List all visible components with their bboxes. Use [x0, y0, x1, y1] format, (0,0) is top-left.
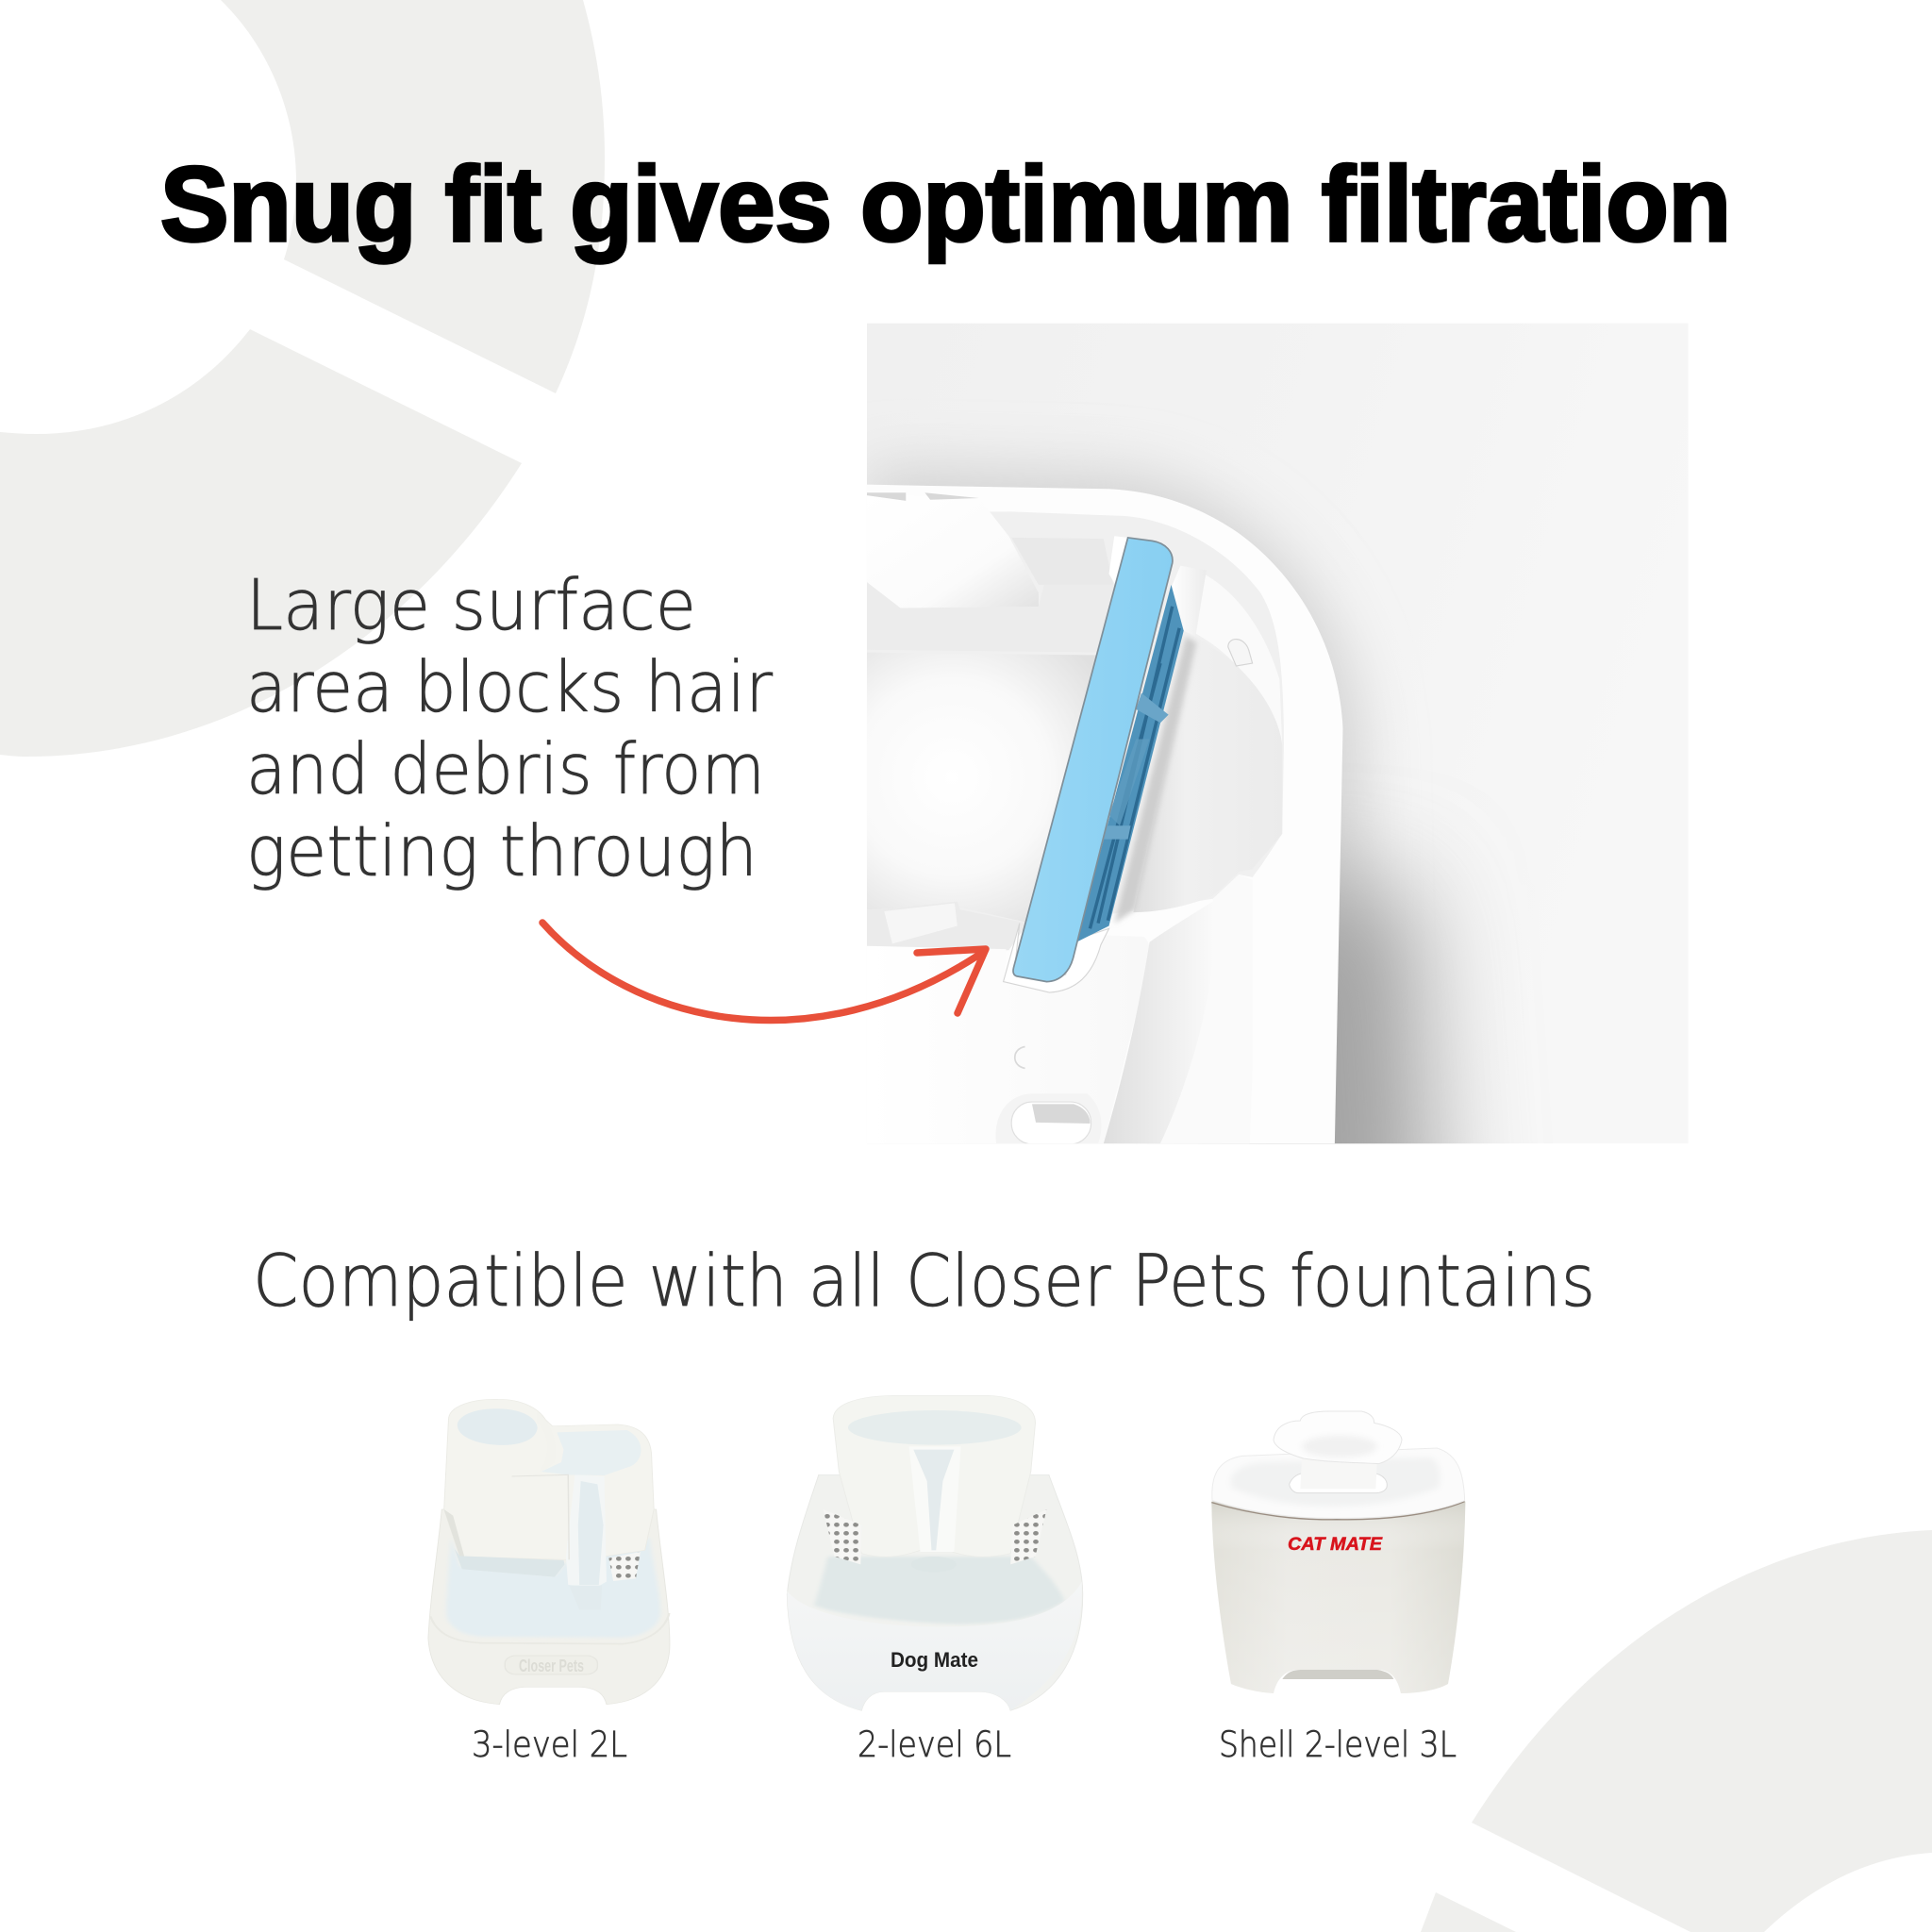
flower shade: [1302, 1436, 1377, 1457]
label: 3-level 2L: 3-level 2L: [472, 1724, 627, 1765]
arrow pointing to filter: [542, 923, 986, 1021]
left perforated panel: [824, 1509, 861, 1564]
spout stem: [1300, 1457, 1377, 1489]
lid: [1212, 1448, 1465, 1518]
right band of lower body: [1104, 914, 1194, 1143]
background paw shape: top left: [0, 0, 605, 757]
tower waterline shade: [444, 1509, 464, 1557]
top collar around filter: [1109, 536, 1207, 636]
left cavity: [867, 653, 1101, 924]
filter blue face: [1013, 538, 1173, 982]
top block: [867, 511, 1039, 608]
wall edge: [511, 1474, 569, 1559]
inner water: [814, 1557, 1065, 1624]
cup pour lip: [537, 1412, 556, 1472]
panel: fountain cutaway with filter: [867, 324, 1689, 1143]
title: Snug fit gives optimum filtration: [160, 145, 1731, 263]
upper basin water: [541, 1430, 641, 1475]
cavity upper ledge: [867, 582, 1117, 653]
tray water: [446, 1538, 660, 1638]
spout: [566, 1474, 607, 1588]
text block: filter description: getting through: [246, 811, 758, 892]
filter chamber wall: [1134, 672, 1282, 912]
notch shadow: [1282, 1670, 1393, 1679]
tower body: [444, 1399, 654, 1559]
top notch: [867, 492, 979, 501]
right front wall: [1160, 874, 1253, 1143]
tray rim: [430, 1613, 669, 1644]
bottom shelf: [892, 926, 1024, 951]
stream: [578, 1481, 604, 1585]
bottom slot: [995, 1093, 1101, 1144]
body sheen: [1211, 1502, 1465, 1693]
fountain: 2-level 6L: [787, 1395, 1083, 1710]
top water: [848, 1410, 1022, 1445]
tower: [833, 1395, 1036, 1557]
flower top: [1274, 1411, 1402, 1464]
shelf lip: [884, 903, 958, 943]
label: 2-level 6L: 2-level 6L: [858, 1724, 1011, 1765]
label: Shell 2-level 3L: Shell 2-level 3L: [1219, 1724, 1457, 1765]
shoulder ledge: [1196, 575, 1282, 741]
bottom collar around filter: [1004, 924, 1109, 992]
stream: [913, 1450, 954, 1550]
panel background: [867, 324, 1689, 1143]
embossed brand: Closer Pets: [519, 1657, 584, 1675]
text block: filter description: and debris from: [246, 729, 765, 810]
text block: filter description: area blocks hair: [246, 647, 774, 728]
lower front body: [867, 945, 1006, 951]
perforated panel: [608, 1552, 641, 1581]
lid recess: [1231, 1457, 1441, 1507]
stream base ripple: [911, 1557, 957, 1573]
lid seam: [1211, 1502, 1465, 1520]
fountain: shell 2-level 3L: [1211, 1411, 1465, 1693]
spout channel: [909, 1446, 961, 1552]
cup water: [458, 1408, 538, 1445]
embossed badge: [505, 1656, 597, 1674]
filter grid side: [1076, 585, 1184, 942]
text block: filter description: [246, 565, 774, 892]
fountain outer body: [867, 485, 1342, 1143]
shadow beside filter: [1114, 636, 1197, 924]
post detail: [1228, 640, 1253, 666]
front face: [787, 1582, 1082, 1710]
upper recess: [1011, 538, 1113, 585]
background paw shape: bottom right: [1421, 1530, 1932, 1932]
fountain: 3-level 2L: [428, 1399, 670, 1705]
inner rim area: [867, 511, 1284, 950]
fountain drop shadow: [867, 468, 1440, 1286]
tray: [428, 1509, 670, 1705]
splash: [569, 1586, 602, 1610]
brand: CAT MATE: CAT MATE: [1288, 1535, 1383, 1555]
spout socket: [1290, 1474, 1387, 1493]
text block: filter description: Large surface: [246, 565, 696, 646]
body: [1211, 1502, 1465, 1693]
right perforated panel: [1010, 1509, 1046, 1564]
brand: Dog Mate: Dog Mate: [891, 1648, 978, 1672]
heading: compatibility: Compatible with all Closer Pets fountains: [253, 1239, 1595, 1323]
screw mark: [1015, 1046, 1025, 1068]
waterline band: [455, 1549, 564, 1577]
tray: [787, 1474, 1083, 1710]
